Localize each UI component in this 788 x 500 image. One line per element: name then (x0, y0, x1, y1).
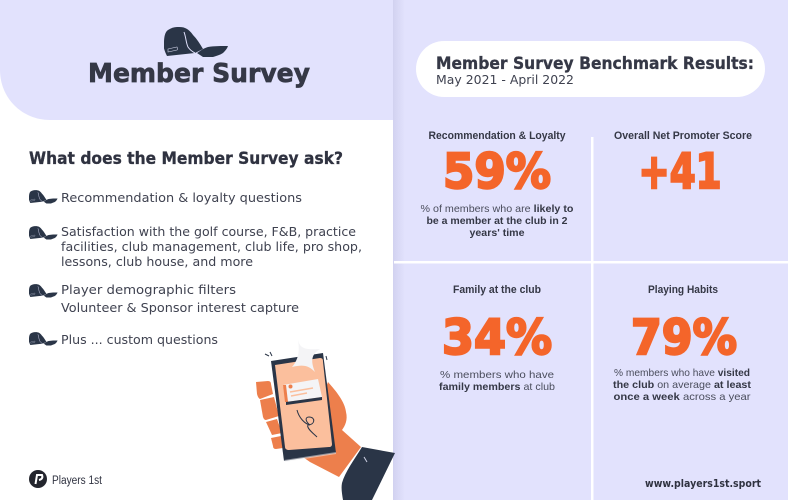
icon: bullet cap 4 (29, 332, 58, 345)
item: satisfaction: facilities, club management, club life, pro shop, (61, 239, 362, 254)
stat: recommendation and loyalty: % of members who are likely to (420, 203, 574, 215)
item: demographics: Player demographic filters (61, 282, 236, 297)
item: volunteer: Volunteer & Sponsor interest capture (61, 300, 299, 315)
title: Member Survey (88, 59, 310, 89)
stat: playing habits: % members who have visited (614, 367, 750, 379)
stat: playing habits: 79% (631, 310, 737, 366)
stat: family at the club: family members at club (439, 381, 555, 393)
heading: benchmark results: Member Survey Benchmark Results: (436, 54, 754, 73)
stat: playing habits: the club on average at least (613, 379, 752, 391)
subtitle: date range: May 2021 - April 2022 (436, 72, 574, 87)
stat: net promoter score: Overall Net Promoter Score (614, 130, 752, 142)
item: satisfaction: lessons, club house, and more (61, 254, 253, 269)
list: survey questions (29, 190, 362, 347)
stat: recommendation and loyalty: Recommendation & Loyalty (428, 130, 566, 142)
stat: net promoter score: +41 (638, 144, 722, 200)
item: satisfaction: Satisfaction with the golf course, F&B, practice (61, 224, 356, 239)
stat: recommendation and loyalty: years' time (470, 227, 525, 239)
stat: family at the club: Family at the club (453, 284, 541, 296)
item: custom: Plus ... custom questions (61, 332, 218, 347)
icon: hand holding phone (256, 340, 395, 500)
stat: recommendation and loyalty: be a member at the club in 2 (426, 215, 568, 227)
icon: bullet cap 1 (29, 190, 58, 203)
stat: family at the club (439, 284, 555, 393)
logo: Players 1st: Players 1st (52, 475, 103, 487)
panel: results background (393, 0, 788, 500)
website url: www.players1st.sport (645, 478, 761, 490)
icon: bullet cap 2 (29, 226, 58, 239)
stat: playing habits: once a week across a year (614, 391, 751, 403)
stat: recommendation and loyalty: 59% (443, 144, 551, 200)
stat: playing habits: Playing Habits (648, 284, 718, 296)
item: recommendation: Recommendation & loyalty questions (61, 190, 302, 205)
stat: family at the club: 34% (442, 310, 552, 366)
icon: bullet cap 3 (29, 284, 58, 297)
heading: what does the survey ask: What does the Member Survey ask? (29, 149, 343, 168)
item: satisfaction (61, 224, 362, 269)
stat: recommendation and loyalty (420, 130, 574, 239)
stat: playing habits (613, 284, 752, 403)
stat: family at the club: % members who have (440, 369, 554, 381)
dividers (394, 137, 788, 500)
logo: Players 1st (29, 470, 103, 488)
icon: header cap (164, 27, 228, 57)
card: results title (416, 41, 765, 97)
panel: left header (0, 0, 393, 120)
stat: net promoter score (614, 130, 752, 200)
